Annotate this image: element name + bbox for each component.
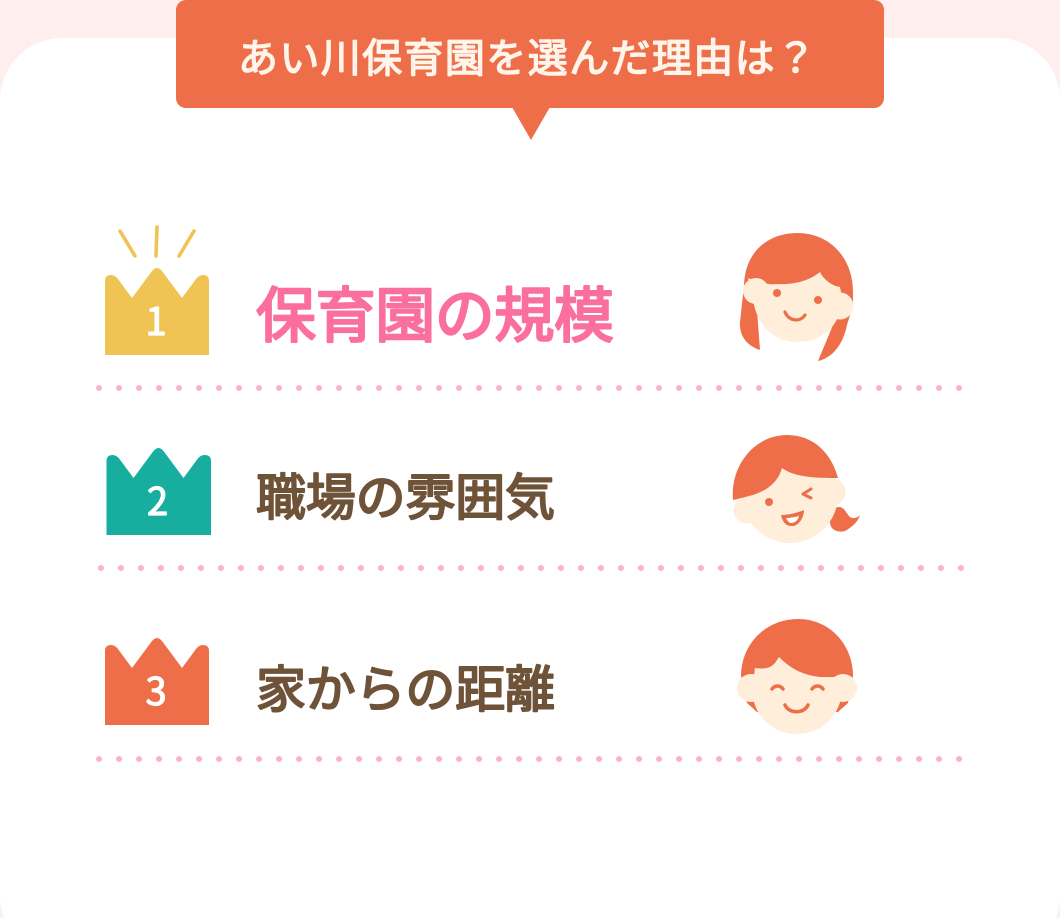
heading: rank 3 reason: 家からの距離 [256,650,555,722]
heading: rank 1 reason: 保育園の規模 [256,268,614,355]
title text: あい川保育園を選んだ理由は？ [238,26,816,84]
icon: orange crown rank 3 [105,638,209,725]
icon: teal crown rank 2 [106,448,211,535]
rank 2 row [106,435,860,543]
dotted divider 1 [99,385,960,391]
icon: winking girl with ponytail [733,435,860,543]
heading: rank 2 reason: 職場の雰囲気 [256,458,555,530]
icon: gold crown rank 1 [105,227,209,355]
title banner [176,0,884,140]
icon: teal crown rank 2: 2 [147,471,168,526]
dotted divider 2 [101,565,962,571]
icon: orange crown rank 3: 3 [145,661,167,716]
icon: gold crown rank 1: 1 [145,291,167,346]
rank 1 row [105,227,854,361]
dotted divider 3 [99,756,960,762]
icon: smiling boy [737,619,857,734]
icon: girl with long hair [740,233,854,361]
rank 3 row [105,619,857,734]
